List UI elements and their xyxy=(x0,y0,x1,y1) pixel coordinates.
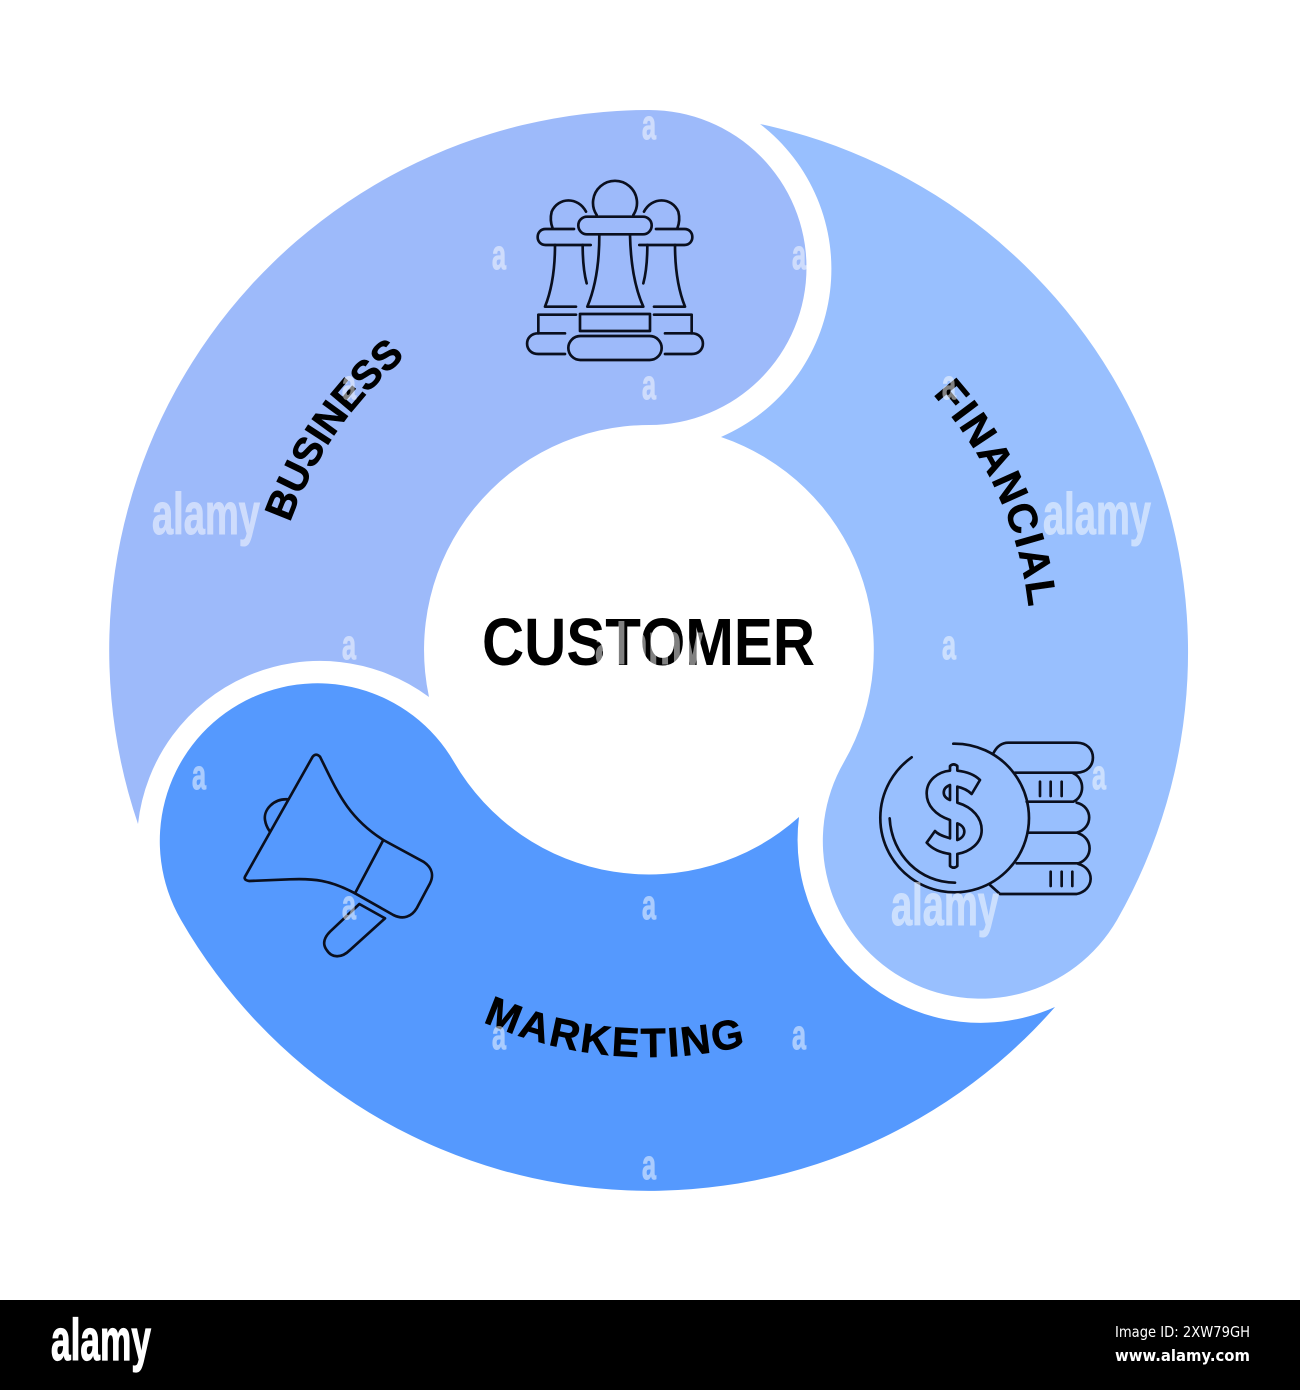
watermarks: alamy xyxy=(595,612,703,677)
watermarks: a xyxy=(942,621,956,668)
icon: chess pawns xyxy=(527,181,703,360)
icon: dollar coin stack xyxy=(880,743,1093,894)
segment: business xyxy=(109,110,807,824)
segment: financial xyxy=(721,124,1188,999)
watermarks: a xyxy=(942,361,956,408)
footer logo: alamy xyxy=(51,1308,151,1373)
watermarks: a xyxy=(492,1011,506,1058)
segment: marketing xyxy=(160,683,1055,1191)
watermarks: alamy xyxy=(152,482,260,547)
watermarks: a xyxy=(642,101,656,148)
watermarks: a xyxy=(792,231,806,278)
icon: megaphone xyxy=(245,755,432,956)
watermarks: a xyxy=(192,751,206,798)
watermarks: a xyxy=(342,881,356,928)
label: business: BUSINESS xyxy=(264,340,402,521)
watermarks: a xyxy=(342,361,356,408)
watermarks: a xyxy=(642,1141,656,1188)
watermarks: a xyxy=(642,361,656,408)
label: financial: FINANCIAL xyxy=(934,378,1055,606)
watermarks: a xyxy=(492,231,506,278)
watermarks: a xyxy=(642,881,656,928)
heading: customer: CUSTOMER xyxy=(482,605,815,680)
watermarks: alamy xyxy=(1043,482,1151,547)
footer url: www.alamy.com xyxy=(1115,1346,1250,1365)
footer image id: Image ID: 2XW79GH xyxy=(1115,1323,1250,1341)
watermarks: alamy xyxy=(891,873,999,938)
footer bar xyxy=(0,1300,1300,1390)
watermarks: a xyxy=(792,1011,806,1058)
watermarks: a xyxy=(1092,751,1106,798)
watermarks xyxy=(152,101,1151,1188)
label: marketing: MARKETING xyxy=(484,996,742,1058)
watermarks: a xyxy=(342,621,356,668)
